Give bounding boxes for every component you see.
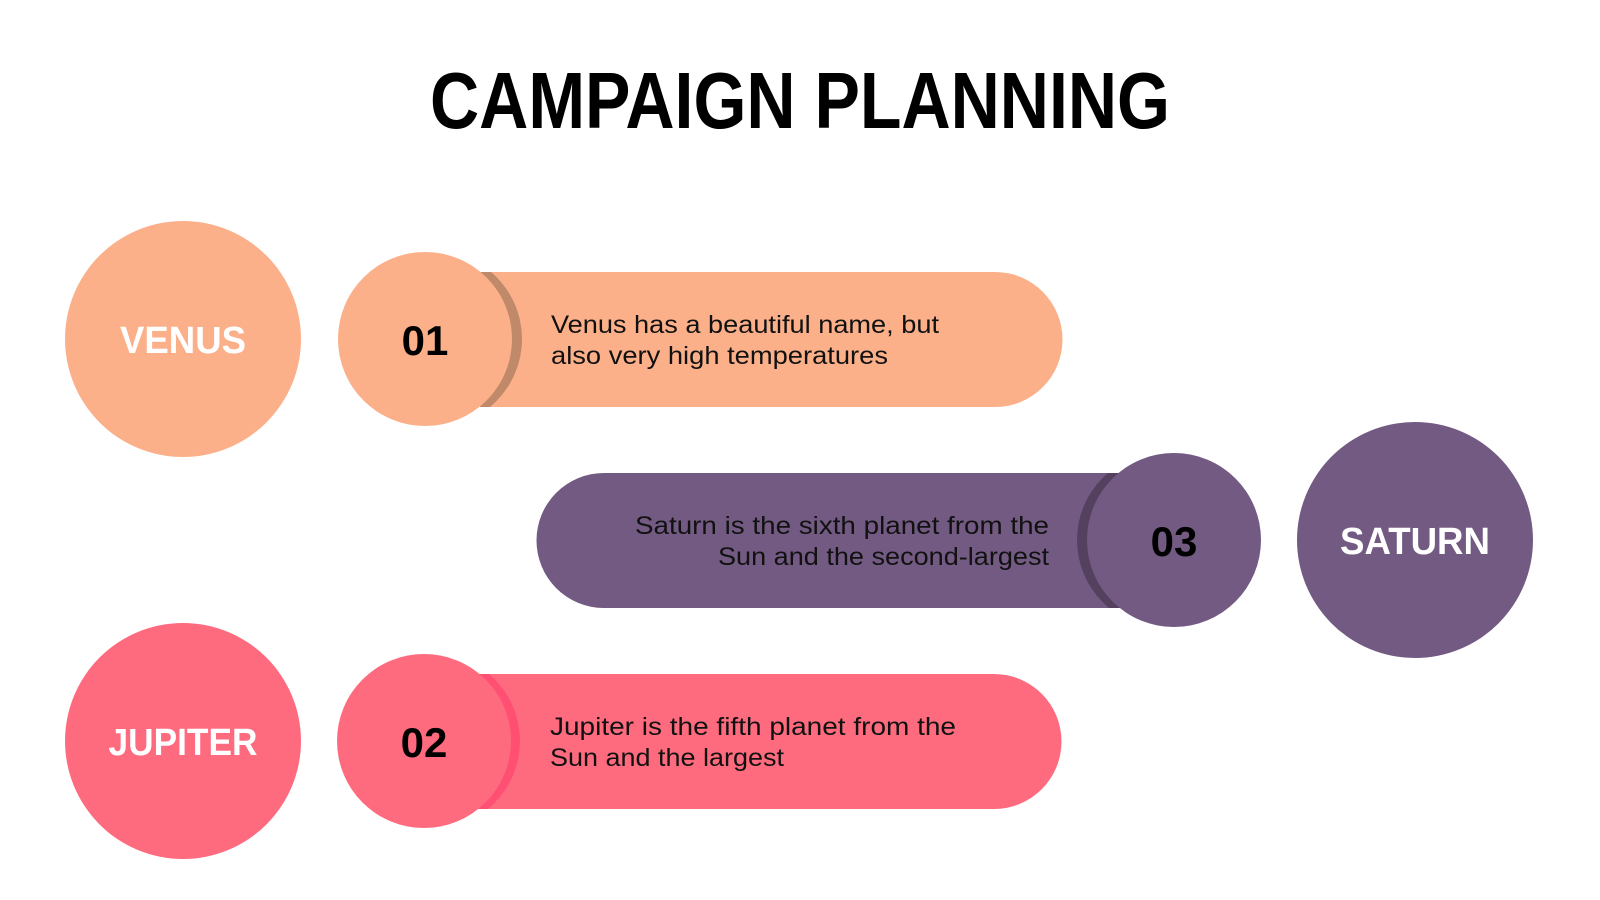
circle: 03: 03 [1151,518,1197,565]
row: jupiter [65,623,1062,859]
pill: venus text: also very high temperatures [551,342,888,370]
pill: saturn text [536,473,1120,608]
circle: venus [65,221,301,457]
circle: 02: 02 [401,719,447,766]
pill: venus text: Venus has a beautiful name, but [551,311,939,339]
circle: 01: 01 [402,317,448,364]
circle: jupiter: JUPITER [108,722,258,764]
circle: 01 [338,252,512,426]
row: saturn [536,422,1533,658]
pill: saturn text: Sun and the second-largest [718,543,1049,571]
title: CAMPAIGN PLANNING [430,56,1170,145]
circle: jupiter [65,623,301,859]
row: venus [65,221,1062,457]
pill: venus text [480,272,1062,407]
pill: jupiter text [478,674,1062,809]
circle: saturn [1297,422,1533,658]
pill: jupiter text: Sun and the largest [550,744,784,772]
pill: jupiter text: Jupiter is the fifth planet from the [550,713,956,741]
circle: 02 [337,654,511,828]
pill: saturn text: Saturn is the sixth planet from the [635,512,1049,540]
circle: saturn: SATURN [1340,521,1490,563]
circle: 03 [1087,453,1261,627]
circle: venus: VENUS [120,320,246,362]
